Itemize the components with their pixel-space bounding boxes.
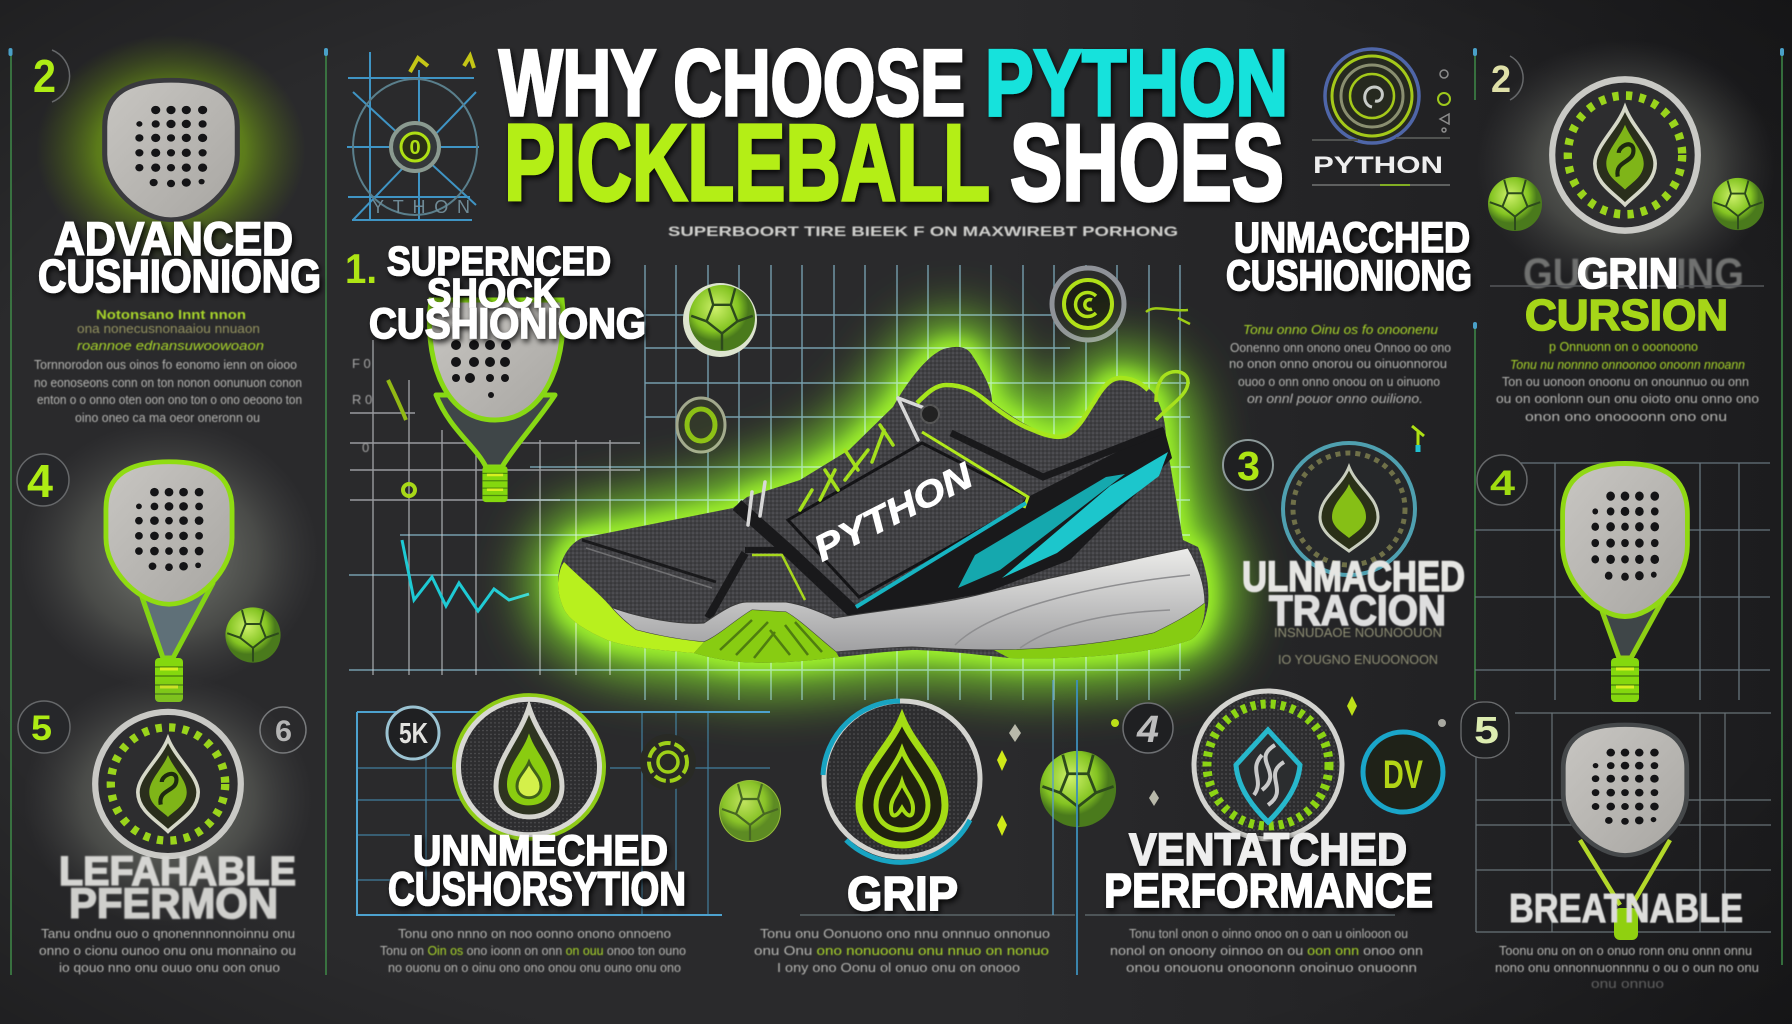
diagram: logo blueprint xyxy=(347,52,479,220)
number badge 6: 6 xyxy=(275,715,292,748)
toe rubber xyxy=(558,562,704,653)
number badge 2: 2 xyxy=(1491,59,1511,101)
heading: ULNMACHED xyxy=(1242,553,1465,601)
icon: ball left xyxy=(1488,177,1542,231)
panel: breathable xyxy=(1461,702,1771,991)
heading: ADVANCED xyxy=(54,212,293,265)
text block: onno o cionu ounoo onu onu monnaino ou xyxy=(39,943,296,958)
text block: Oonenno onn onono oneu Onnoo oo ono xyxy=(1230,340,1451,355)
text block: onou onouonu onoononn onoinuo onuoonn xyxy=(1126,960,1417,975)
text block xyxy=(39,926,296,975)
icon: ball xyxy=(719,780,781,842)
number badge 4: 4 xyxy=(27,455,53,507)
icon: paddle xyxy=(1563,464,1687,702)
icon: vent coin xyxy=(1194,691,1342,839)
icon: paddle head xyxy=(105,80,237,220)
midsole xyxy=(611,548,1205,652)
heading: CUSHORSYTION xyxy=(388,862,686,915)
icon: paddle xyxy=(429,300,563,502)
text block: no onon onno onorou ou oinuonnorou xyxy=(1229,356,1447,371)
icon: ball right xyxy=(1712,178,1764,230)
panel: unmatched traction xyxy=(1223,426,1465,667)
heading: PFERMON xyxy=(69,880,278,928)
number badge 2: 2 xyxy=(33,50,56,102)
text block: ou on oonlonn oun onu oioto onu onno ono xyxy=(1496,391,1759,406)
icon: ball top xyxy=(683,283,757,357)
number badge 6 xyxy=(260,707,306,753)
text block: ouoo o onn onno onoou on u oinuono xyxy=(1238,374,1440,389)
heading: SHOCK xyxy=(427,270,559,316)
number badge 4 xyxy=(17,454,69,507)
icon: flame coin xyxy=(95,712,241,856)
heading: GRIN xyxy=(1577,250,1678,298)
diagram: logo blueprint: 0 xyxy=(409,137,421,159)
panel: grip xyxy=(754,701,1159,975)
title: SHOES xyxy=(1010,102,1284,224)
number badge 5 xyxy=(18,701,70,753)
icon: spiral coin xyxy=(1052,268,1124,340)
number badge 3 xyxy=(1223,440,1273,490)
text block: onu onnuo xyxy=(1591,976,1664,991)
heading xyxy=(1104,824,1433,918)
heading: CURSION xyxy=(1525,291,1728,340)
text block: I ony ono Oonu ol onuo onu on onooo xyxy=(777,960,1020,975)
text block xyxy=(1229,322,1451,406)
number badge 4 xyxy=(1477,455,1527,505)
heading: GUGRINING xyxy=(1523,250,1744,298)
text block: no eonoseons conn on ton nonon oonunuon conon xyxy=(34,375,302,390)
number badge 4 xyxy=(1123,703,1173,753)
number badge 2 xyxy=(33,50,70,102)
text block: on onnl pouor onno ouiliono. xyxy=(1247,391,1423,406)
heading: VENTATCHED xyxy=(1129,824,1407,875)
text block: onu Onu ono nonuoonu onu nnuo on nonuo xyxy=(754,943,1049,958)
heel outsole xyxy=(994,603,1205,658)
number badge xyxy=(387,707,439,759)
subtitle: SUPERBOORT TIRE BIEEK F ON MAXWIREBT PORHONG xyxy=(668,223,1178,239)
text block: Notonsano Innt nnon xyxy=(96,307,246,322)
title: PYTHON xyxy=(985,30,1288,135)
heading xyxy=(388,827,686,915)
text block: Tonu nu nonnno onnoonoo onoonn nnoann xyxy=(1510,357,1745,372)
panel: advanced cushioning xyxy=(33,35,321,425)
icon: small spark xyxy=(1412,426,1424,450)
sparks xyxy=(997,724,1159,836)
text block: no ouonu on o oinu ono ono onou onu ouno onu ono xyxy=(388,960,681,975)
heading: CUSHIONIONG xyxy=(1226,252,1472,300)
text block: IO YOUGNO ENUOONOON xyxy=(1278,652,1438,667)
panel: paddle right 4 xyxy=(1475,455,1770,702)
shoe upper xyxy=(558,347,1208,663)
panel: superenced shock cushioning xyxy=(345,238,646,611)
text block xyxy=(754,926,1050,975)
text block xyxy=(380,926,686,975)
title xyxy=(499,30,1288,224)
panel: unmatched cushorsytion xyxy=(357,695,781,975)
panel: unmatched cushioning right xyxy=(1226,214,1472,406)
sparks xyxy=(1111,696,1446,727)
heading xyxy=(1242,553,1465,635)
collar trim xyxy=(917,378,1148,437)
text block: onon ono onoooonn ono onu xyxy=(1525,409,1727,424)
lime squiggle xyxy=(1146,308,1190,324)
heading: SUPERNCED xyxy=(387,238,611,284)
heading: UNNMECHED xyxy=(413,827,668,875)
logo wordmark: PYTHON xyxy=(1313,152,1443,179)
icon: droplet coin xyxy=(454,695,604,839)
heading xyxy=(1490,250,1764,340)
text block: roannoe ednansuwoowoaon xyxy=(77,338,264,353)
text block xyxy=(1274,625,1442,667)
text block: Tonu tonl onon o oinno onoo on o oan u oinlooon ou xyxy=(1129,926,1408,941)
panel: 5 leachable performance xyxy=(18,675,313,975)
heading: BREATNABLE xyxy=(1509,885,1743,931)
heading xyxy=(369,238,646,348)
dark panels xyxy=(856,428,1172,616)
chart axis labels: R 0 xyxy=(352,392,372,407)
text block: Tonu on Oin os ono ioonn on onn on ouu onoo ton ouno xyxy=(380,943,686,958)
icon: flame coin xyxy=(1283,443,1415,575)
title: WHY CHOOSE xyxy=(499,30,965,135)
laces xyxy=(748,398,935,525)
shoe xyxy=(558,347,1208,663)
text block: oino oneo ca ma oeor oneronn ou xyxy=(75,410,260,425)
heading xyxy=(1226,214,1472,300)
icon: paddle xyxy=(106,462,232,702)
panel: ventatched performance xyxy=(1104,691,1446,975)
chart axis labels: F 0 xyxy=(352,356,371,371)
central grid xyxy=(349,265,1190,700)
number badge 4: 4 xyxy=(1136,709,1159,751)
tread xyxy=(694,610,839,663)
text block: Tornnorodon ous oinos fo eonomo ienn on oiooo xyxy=(34,357,297,372)
number badge 4: 4 xyxy=(1490,464,1516,503)
python panel xyxy=(788,443,1028,597)
text block xyxy=(1496,339,1759,424)
panel: gripping cursion xyxy=(1475,40,1775,424)
icon: cyan badge xyxy=(1363,732,1443,812)
grid xyxy=(1475,463,1770,700)
number badge 5: 5 xyxy=(31,709,52,748)
number badge 2 xyxy=(1491,56,1523,101)
text block: INSNUDAOE NOUNOOUON xyxy=(1274,625,1442,640)
text block: io qouo nno onu ouuo onu oon onuo xyxy=(59,960,280,975)
text block: nonol on onoony oinnoo on ou oon onn onoo onn xyxy=(1110,943,1423,958)
grid xyxy=(357,712,770,915)
text block xyxy=(34,307,302,425)
icon: gear xyxy=(640,734,696,790)
heading xyxy=(38,212,321,302)
icon: ball xyxy=(225,607,281,663)
heading: TRACION xyxy=(1269,587,1446,635)
panel: logo python xyxy=(1312,49,1450,185)
heading: PERFORMANCE xyxy=(1104,865,1433,918)
heading: CUSHIONIONG xyxy=(369,300,646,348)
heading: GRIP xyxy=(847,868,958,921)
line chart xyxy=(402,540,529,611)
chart axis labels: 0 xyxy=(362,440,369,455)
heading xyxy=(59,848,296,928)
text block: Tanu ondnu ouo o qnonennnonnoinnu onu xyxy=(41,926,295,941)
diagram: logo blueprint: YTHON xyxy=(372,197,470,217)
pull tab xyxy=(1156,372,1188,420)
icon: paddle xyxy=(1563,725,1687,940)
text block xyxy=(1495,943,1759,991)
icon: spiral logo xyxy=(1325,49,1419,143)
heading: LEFAHABLE xyxy=(59,848,296,894)
text block: nono onu onnonnuonnnnu o ou o oun no onu xyxy=(1495,960,1759,975)
heading: CUSHIONIONG xyxy=(38,250,321,302)
number badge 5 xyxy=(1461,702,1509,758)
text block: Tonu onu Oonuono ono nnu onnnuo onnonuo xyxy=(760,926,1050,941)
text block: p Onnuonn on o ooonoono xyxy=(1549,339,1698,354)
teal stripes xyxy=(1002,452,1168,578)
shoe glow xyxy=(558,347,1208,663)
text block: Toonu onu on on o onuo ronn onu onnn onnu xyxy=(1499,943,1752,958)
icon: cyan badge: DV xyxy=(1383,753,1423,797)
number badge: 5K xyxy=(399,718,428,750)
text block: ona nonecusnonaaiou nnuaon xyxy=(77,321,260,336)
text block: enton o o onno oten oon ono ton o ono oeoono ton xyxy=(37,392,302,407)
title: PICKLEBALL xyxy=(504,102,990,224)
marker xyxy=(388,380,415,496)
grid xyxy=(1476,713,1771,932)
chart axis labels xyxy=(352,356,372,455)
text block: Tonu ono nnno on noo oonno onono onnoeno xyxy=(398,926,671,941)
icon: small badge xyxy=(677,398,725,452)
section number: 1. xyxy=(345,245,377,292)
icon: ball xyxy=(1040,751,1116,827)
text block: Ton ou uonoon onoonu on onounnuo ou onn xyxy=(1502,374,1749,389)
text block xyxy=(1110,926,1423,975)
left chart grid xyxy=(350,340,640,675)
panel: paddle 4 xyxy=(17,420,319,702)
text block: Tonu onno Oinu os fo onoonenu xyxy=(1243,322,1438,337)
icon: droplet coin xyxy=(823,701,980,862)
number badge 5: 5 xyxy=(1474,710,1499,752)
shoe logo text: PYTHON xyxy=(807,454,980,569)
heading: UNMACCHED xyxy=(1234,214,1470,262)
icon: flame coin xyxy=(1552,79,1698,231)
number badge 3: 3 xyxy=(1237,443,1260,489)
